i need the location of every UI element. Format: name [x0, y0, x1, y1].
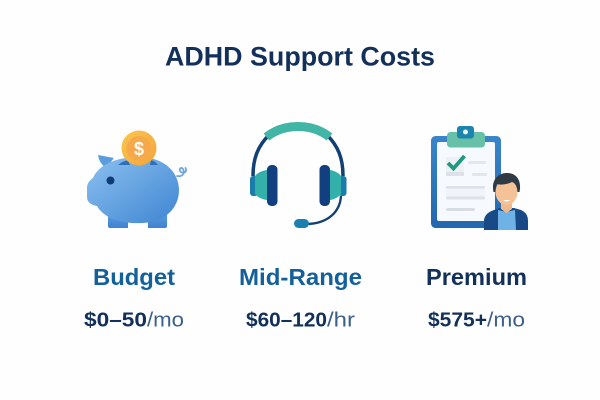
- price: budget: /mo: [147, 310, 184, 332]
- check mark: [448, 156, 464, 168]
- clipboard board: [431, 136, 501, 228]
- face: [496, 179, 518, 205]
- pig eye: [106, 176, 114, 184]
- right ear cup: [320, 165, 346, 206]
- price: mid-range: /hr: [327, 310, 355, 332]
- price: budget: $0–50: [84, 310, 147, 332]
- jacket: [484, 208, 528, 230]
- neck: [501, 203, 512, 213]
- headband: [253, 135, 343, 176]
- pig legs: [108, 212, 167, 228]
- icon: headset: [250, 126, 346, 228]
- price: premium: [428, 310, 525, 332]
- heading: Budget: Budget: [93, 264, 175, 290]
- person: [484, 173, 528, 230]
- microphone boom: [308, 196, 341, 224]
- price: premium: $575+: [428, 310, 487, 332]
- price: mid-range: $60–120: [246, 310, 327, 332]
- pig ear: [98, 155, 114, 168]
- heading: Mid-Range: Mid-Range: [239, 264, 362, 290]
- microphone: [294, 219, 309, 228]
- title: ADHD Support Costs: [165, 42, 435, 72]
- smile: [503, 200, 510, 202]
- icon: piggy bank with coin: [87, 130, 186, 228]
- price: premium: /mo: [487, 310, 525, 332]
- heading: Premium: Premium: [426, 264, 527, 290]
- hair: [493, 173, 520, 192]
- clip: [447, 132, 485, 148]
- clipboard paper: [437, 142, 495, 221]
- coin: $: [134, 139, 144, 159]
- price: budget: [84, 310, 184, 332]
- coin slot: [118, 160, 158, 165]
- shirt: [498, 210, 516, 230]
- pig tail: [177, 168, 186, 176]
- icon: clipboard with person: [431, 126, 528, 230]
- left ear cup: [250, 165, 278, 206]
- pig body: [87, 157, 179, 223]
- checklist lines: [446, 157, 487, 211]
